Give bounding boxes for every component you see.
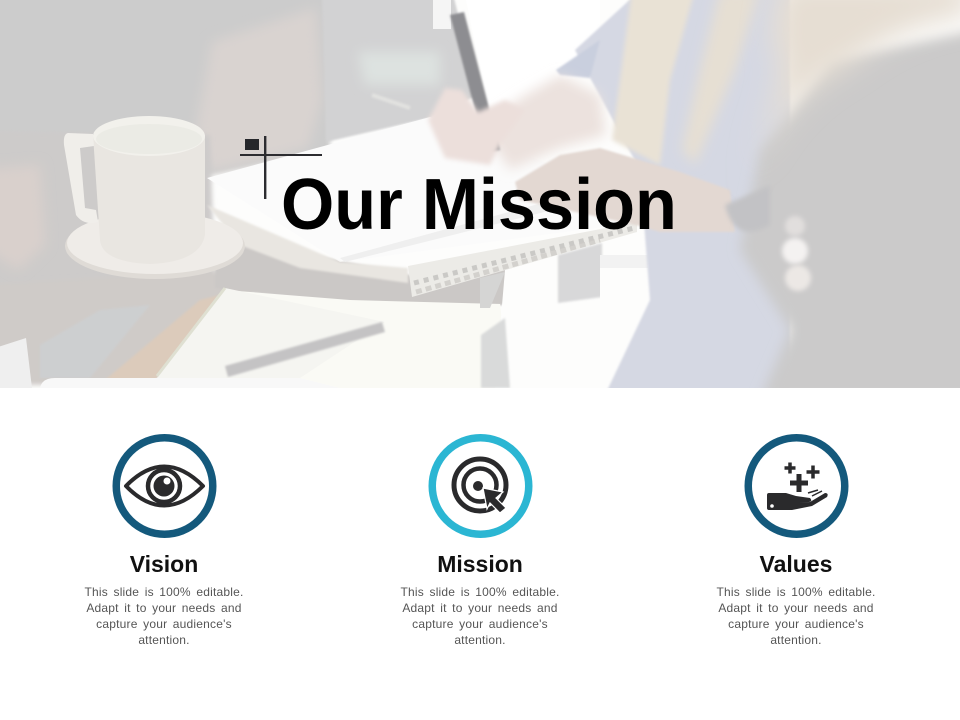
blonde hair (612, 0, 760, 165)
left arm and wrist (0, 130, 215, 300)
text block: capture your audience's (412, 617, 548, 631)
text block: attention. (770, 633, 822, 647)
title accent: crosshair and square (240, 136, 322, 199)
wooden table (0, 295, 220, 388)
panel: washed out photo banner (0, 0, 960, 388)
text block: Adapt it to your needs and (402, 601, 558, 615)
dark shirt, top left (0, 0, 330, 175)
window highlight (465, 0, 600, 115)
panel: vision (84, 434, 244, 647)
icon: eye in circle (112, 434, 216, 538)
text block: Adapt it to your needs and (86, 601, 242, 615)
open notebook (207, 117, 640, 297)
text block: Adapt it to your needs and (718, 601, 874, 615)
text block: capture your audience's (728, 617, 864, 631)
heading: Mission (437, 551, 523, 577)
text block (84, 585, 244, 647)
writing hand and pen (428, 12, 525, 165)
chair background (322, 0, 478, 142)
forearm and resting hand (515, 148, 735, 232)
raised arm (480, 75, 606, 170)
panel: mission (400, 434, 560, 647)
bottom white sheet (40, 378, 340, 388)
dark lower table (0, 270, 260, 385)
coffee mug and saucer (64, 116, 245, 279)
text block: attention. (138, 633, 190, 647)
blue dress (556, 0, 790, 395)
text block (716, 585, 876, 647)
heading: Vision (130, 551, 198, 577)
text block: attention. (454, 633, 506, 647)
text block: This slide is 100% editable. (400, 585, 560, 599)
out of focus person, right (725, 0, 960, 400)
text block: This slide is 100% editable. (84, 585, 244, 599)
panel: values (716, 434, 876, 647)
white table leg (495, 255, 610, 388)
text block: This slide is 100% editable. (716, 585, 876, 599)
title: Our Mission (281, 164, 677, 245)
heading: Values (760, 551, 832, 577)
icon: target with cursor in circle (428, 434, 532, 538)
table surface (150, 290, 510, 388)
icon: hand with sparkles in circle (744, 434, 848, 538)
text block (400, 585, 560, 647)
text block: capture your audience's (96, 617, 232, 631)
lower notepad (157, 288, 385, 378)
dark band under notebook (215, 235, 560, 308)
